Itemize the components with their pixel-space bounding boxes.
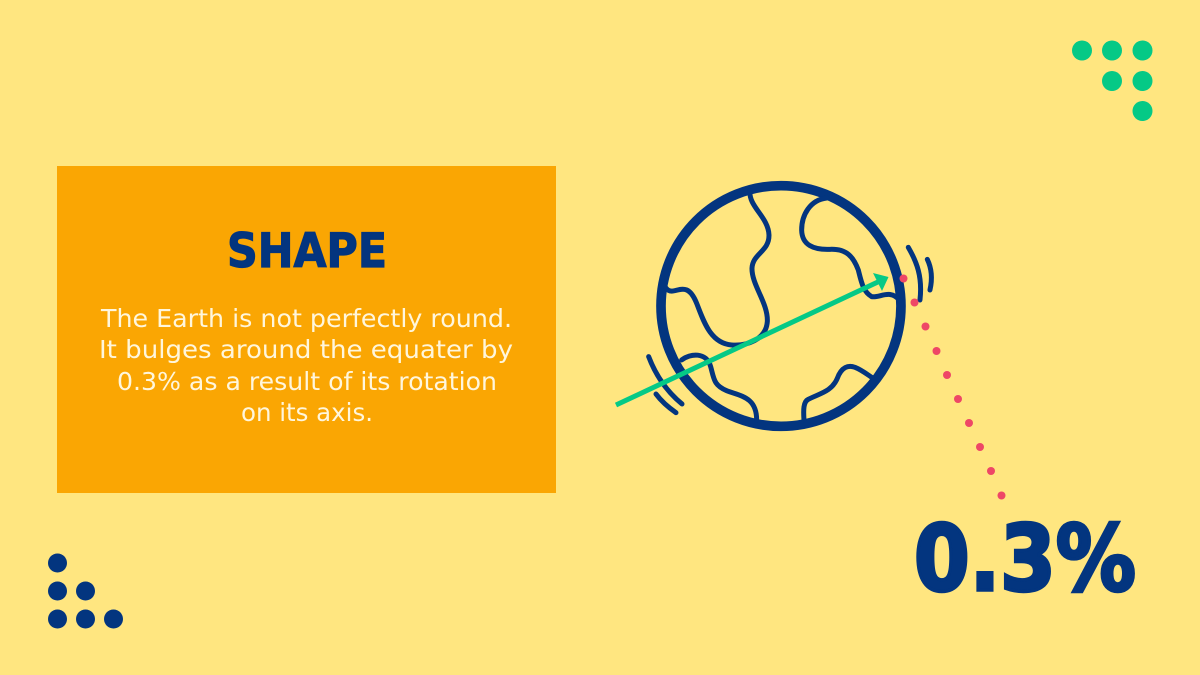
panel: shape description — [57, 166, 556, 493]
value: 0.3%: 0.3% — [914, 507, 1136, 612]
icon: globe with bulge marks — [649, 186, 931, 426]
bulge marks right — [908, 247, 931, 300]
decoration: green dots — [1072, 40, 1152, 121]
globe outline — [661, 186, 901, 426]
text block: description — [99, 304, 513, 427]
text block: description: The Earth is not perfectly round. — [100, 304, 512, 333]
bulge marks left — [649, 357, 682, 413]
text block: description: on its axis. — [241, 398, 373, 427]
text block: description: 0.3% as a result of its rotation — [117, 367, 497, 396]
heading: SHAPE: SHAPE — [227, 224, 387, 279]
dotted line to value — [900, 274, 1006, 500]
decoration: blue dots — [48, 554, 123, 628]
continent lines — [666, 191, 900, 420]
arrow: rotation axis — [616, 273, 888, 405]
text block: description: It bulges around the equater by — [99, 335, 513, 364]
